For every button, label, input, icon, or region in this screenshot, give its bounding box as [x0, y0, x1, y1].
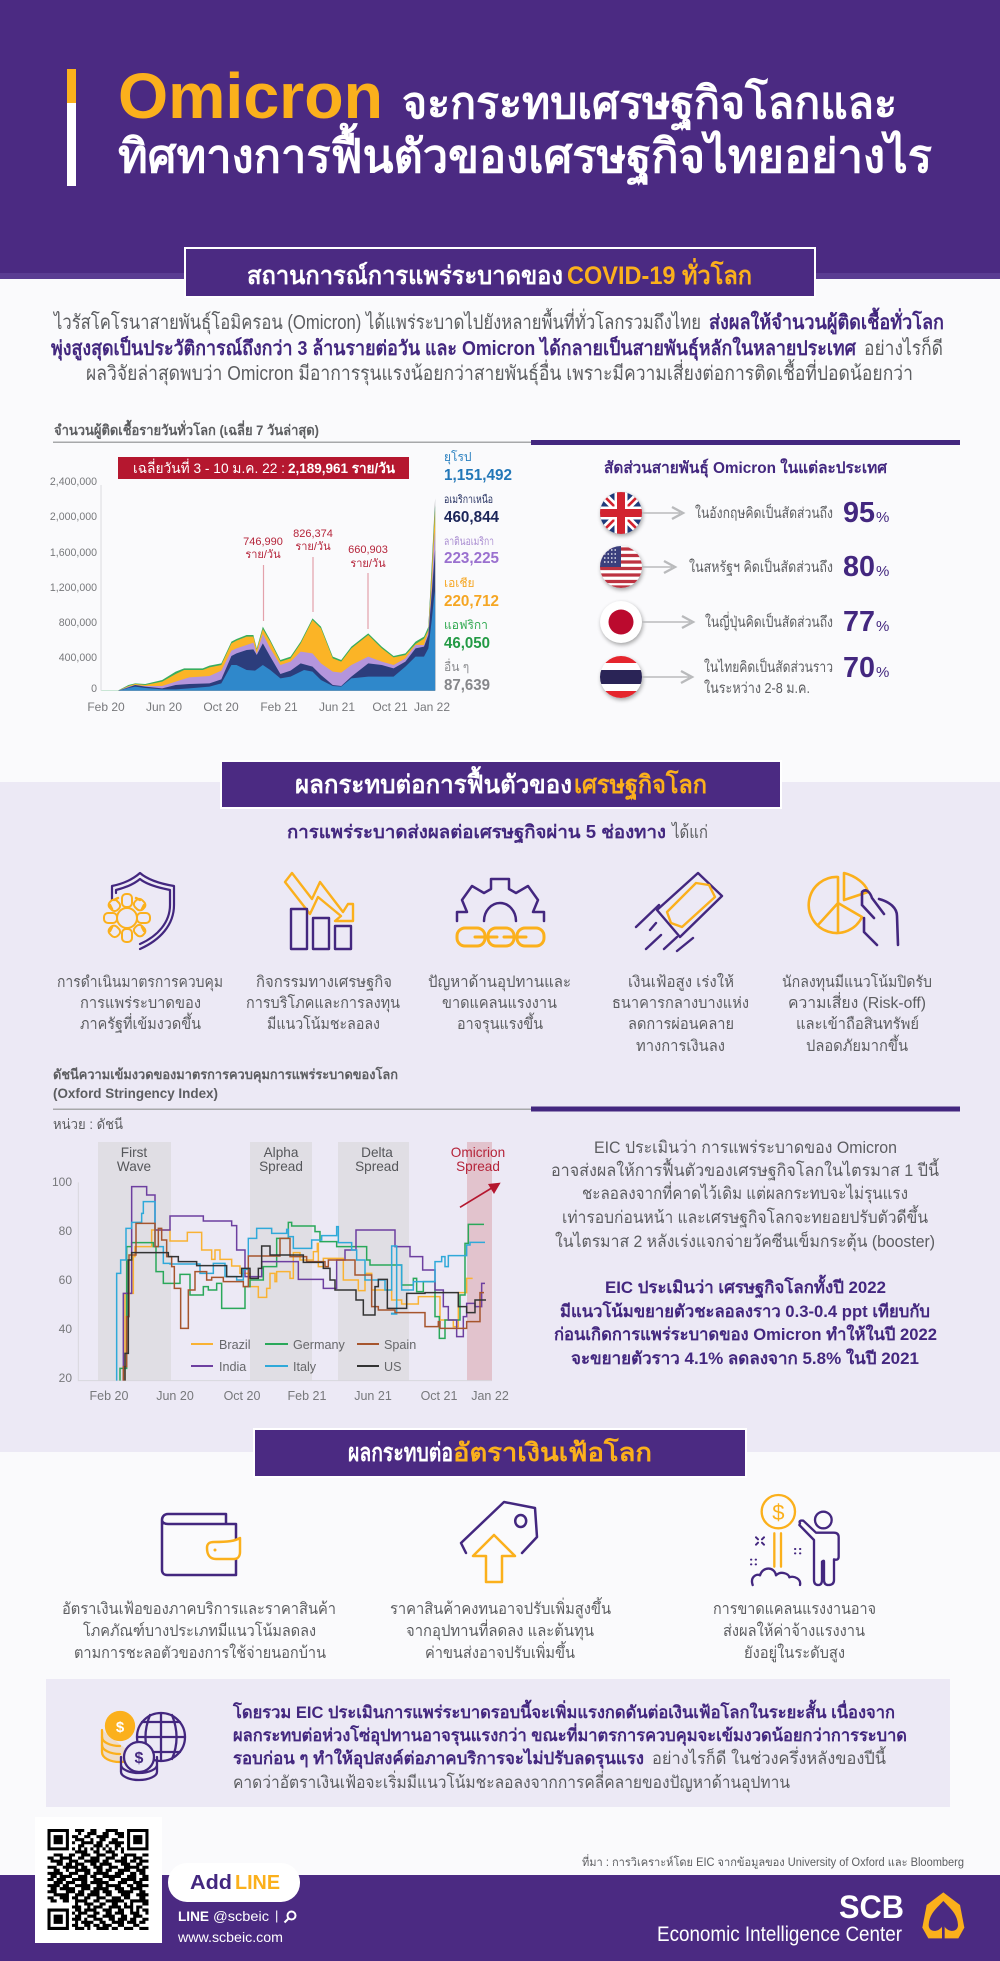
legend: India	[219, 1360, 246, 1374]
region legend values: แอฟริกา	[444, 618, 488, 632]
text	[390, 1597, 611, 1662]
row: Thailand: 70	[843, 652, 875, 684]
chart title: (Oxford Stringency Index)	[53, 1086, 218, 1101]
section heading: COVID-19 situation	[185, 248, 815, 297]
x axis labels: Jun 20	[146, 700, 182, 714]
text: การดำเนินมาตรการควบคุม	[57, 974, 223, 992]
icon: coins and globe: $	[116, 1719, 125, 1736]
region legend values: 460,844	[444, 509, 499, 526]
x axis labels: Feb 20	[90, 1389, 129, 1403]
row: UK: %	[876, 509, 889, 526]
text: ปัญหาด้านอุปทานและ	[428, 974, 571, 992]
text	[57, 974, 223, 1033]
text block: EIC assessment: ก่อนเกิดการแพร่ระบาดของ Omicron ทำให้ในปี 2022	[554, 1324, 937, 1344]
x axis labels: Oct 21	[372, 700, 408, 714]
text: ขาดแคลนแรงงาน	[442, 995, 557, 1012]
row: Thailand	[600, 652, 889, 700]
icon: gear and chain	[457, 879, 544, 946]
contact details	[177, 1908, 296, 1945]
row: UK	[600, 492, 889, 536]
inflation item 1	[62, 1514, 336, 1662]
x axis labels	[90, 1389, 509, 1403]
y axis labels: 80	[59, 1224, 72, 1238]
text	[612, 973, 749, 1055]
band labels: Delta	[361, 1145, 393, 1160]
legend: US	[384, 1360, 402, 1374]
channel 5: risk-off	[782, 873, 932, 1055]
section heading: COVID-19 situation: สถานการณ์การแพร่ระบาดของ	[247, 261, 563, 290]
x axis labels	[87, 700, 450, 714]
text block: EIC assessment: อาจส่งผลให้การฟื้นตัวของเศรษฐกิจโลกในไตรมาส 1 ปีนี้	[551, 1158, 939, 1181]
x axis labels: Jan 22	[414, 700, 450, 714]
x axis labels: Jun 20	[156, 1389, 194, 1403]
section heading: COVID-19 situation: COVID-19 ทั่วโลก	[567, 258, 752, 290]
region legend values: 220,712	[444, 593, 499, 610]
band labels	[117, 1145, 505, 1174]
peak annotations: ราย/วัน	[245, 549, 281, 561]
text block: EIC assessment: EIC ประเมินว่า การแพร่ระบาดของ Omicron	[594, 1138, 897, 1157]
x axis labels: Feb 20	[87, 700, 125, 714]
intro paragraph: อย่างไรก็ดี	[864, 335, 943, 360]
icon: flying banknote	[636, 873, 722, 951]
contact details: |	[275, 1908, 278, 1923]
icon: falling bars	[285, 873, 353, 949]
band labels: First	[121, 1145, 147, 1160]
text: มีแนวโน้มชะลอลง	[267, 1015, 380, 1033]
section heading: world inflation: อัตราเงินเฟ้อโลก	[453, 1437, 652, 1467]
row: US: %	[876, 563, 889, 580]
region legend values: เอเชีย	[444, 576, 475, 590]
text	[782, 973, 932, 1055]
text	[62, 1600, 336, 1662]
row: Japan: ในญี่ปุ่นคิดเป็นสัดส่วนถึง	[705, 611, 833, 632]
text: การแพร่ระบาดของ	[80, 995, 201, 1012]
row: Japan: %	[876, 618, 889, 635]
channel 2: economic activity	[246, 873, 400, 1033]
panel: EIC inflation summary	[46, 1679, 950, 1807]
header band	[0, 0, 1000, 279]
intro paragraph: พุ่งสูงสุดเป็นประวัติการณ์ถึงกว่า 3 ล้านรายต่อวัน และ Omicron ได้กลายเป็นสายพันธุ์หลักในหลายประเทศ	[51, 335, 857, 362]
intro paragraph: ไวรัสโคโรนาสายพันธุ์โอมิครอน (Omicron) ได้แพร่ระบาดไปยังหลายพื้นที่ทั่วโลกรวมถึงไทย	[52, 308, 701, 335]
panel heading: สัดส่วนสายพันธุ์ Omicron ในแต่ละประเทศ	[604, 458, 888, 478]
text: ธนาคารกลางบางแห่ง	[612, 995, 749, 1012]
title: Omicron	[118, 60, 383, 132]
band labels: Spread	[355, 1159, 399, 1174]
wave bands	[98, 1142, 492, 1381]
Add LINE button: LINE	[235, 1872, 280, 1894]
intro paragraph	[51, 307, 944, 386]
y axis labels: 800,000	[59, 617, 97, 629]
x axis labels: Oct 20	[203, 700, 239, 714]
Add LINE button: Add	[190, 1872, 232, 1894]
band labels: Spread	[456, 1159, 500, 1174]
text: และเข้าถือสินทรัพย์	[796, 1015, 919, 1033]
y axis labels	[52, 1175, 72, 1385]
row: US: ในสหรัฐฯ คิดเป็นสัดส่วนถึง	[689, 557, 833, 576]
legend: Italy	[293, 1360, 317, 1374]
SCB EIC logo: Economic Intelligence Center	[657, 1923, 902, 1946]
y axis labels: 0	[91, 683, 97, 695]
callout: average banner: เฉลี่ยวันที่ 3 - 10 ม.ค. 22 :	[133, 459, 285, 476]
contact details: @scbeic	[213, 1909, 269, 1924]
y axis labels: 100	[52, 1175, 72, 1189]
text: ภาครัฐที่เข้มงวดขึ้น	[80, 1012, 201, 1033]
text: ลดการผ่อนคลาย	[628, 1016, 734, 1033]
section heading: world economic recovery: เศรษฐกิจโลก	[574, 769, 707, 801]
icon: coins and globe: $	[135, 1750, 144, 1767]
text: จากอุปทานที่ลดลง และต้นทุน	[406, 1619, 594, 1641]
callout: average banner	[118, 457, 409, 479]
text: ปลอดภัยมากขึ้น	[806, 1034, 908, 1055]
text: นักลงทุนมีแนวโน้มปิดรับ	[782, 973, 932, 992]
row: Thailand: ในระหว่าง 2-8 ม.ค.	[704, 679, 810, 697]
callout: average banner: 2,189,961 ราย/วัน	[288, 460, 395, 476]
x axis labels: Feb 21	[288, 1389, 327, 1403]
x axis labels: Jan 22	[471, 1389, 509, 1403]
QR code	[35, 1817, 162, 1943]
region legend values: 87,639	[444, 677, 490, 694]
row: Japan: 77	[843, 606, 875, 638]
row: UK: 95	[843, 497, 875, 529]
y axis labels	[50, 476, 97, 695]
icon: coins and globe	[102, 1712, 185, 1780]
text block: EIC assessment	[551, 1138, 939, 1368]
text block: EIC assessment: เท่ารอบก่อนหน้า และเศรษฐกิจโลกจะทยอยปรับตัวดีขึ้น	[562, 1205, 928, 1228]
legend	[191, 1338, 416, 1374]
row: Japan	[600, 601, 889, 645]
region legend values: ลาตินอเมริกา	[444, 536, 494, 548]
y axis labels: 60	[59, 1273, 72, 1287]
region legend values: อเมริกาเหนือ	[444, 493, 493, 506]
region legend values: 1,151,492	[444, 467, 512, 484]
band labels: Wave	[117, 1159, 151, 1174]
text: ยังอยู่ในระดับสูง	[744, 1643, 845, 1663]
SCB EIC logo	[657, 1889, 964, 1946]
lavender section background	[0, 782, 1000, 1452]
channel 4: inflation	[612, 873, 749, 1055]
region legend values	[444, 450, 512, 694]
row: Thailand: ในไทยคิดเป็นสัดส่วนราว	[704, 657, 833, 676]
icon: person reaching coin: $	[772, 1500, 784, 1525]
panel: Omicron share by country	[600, 458, 889, 700]
peak annotations: 826,374	[293, 528, 333, 540]
title: ทิศทางการฟื้นตัวของเศรษฐกิจไทยอย่างไร	[118, 122, 932, 186]
section heading: world economic recovery	[221, 761, 781, 808]
intro paragraph: ส่งผลให้จำนวนผู้ติดเชื้อทั่วโลก	[709, 307, 944, 336]
source note: ที่มา : การวิเคราะห์โดย EIC จากข้อมูลของ University of Oxford และ Bloomberg	[582, 1854, 964, 1869]
title: จะกระทบเศรษฐกิจโลกและ	[402, 76, 897, 131]
channel 1: government measures	[57, 873, 223, 1033]
subheading: five channels: การแพร่ระบาดส่งผลต่อเศรษฐกิจผ่าน 5 ช่องทาง	[287, 822, 666, 844]
unit label: หน่วย : ดัชนี	[53, 1116, 123, 1132]
line chart	[78, 1182, 501, 1381]
icon: person reaching coin	[751, 1495, 839, 1585]
text	[428, 974, 571, 1034]
text: รอบก่อน ๆ ทำให้อุปสงค์ต่อภาคบริการจะไม่ปรับลดรุนแรง	[233, 1748, 644, 1769]
text block: EIC assessment: ชะลอลงจากที่คาดไว้เดิม แต่ผลกระทบจะไม่รุนแรง	[582, 1181, 908, 1204]
subheading: five channels: ได้แก่	[670, 821, 708, 842]
text block: EIC assessment: จะขยายตัวราว 4.1% ลดลงจาก 5.8% ในปี 2021	[571, 1348, 919, 1368]
y axis labels: 1,600,000	[50, 547, 97, 559]
y axis labels: 1,200,000	[50, 582, 97, 594]
icon: search	[284, 1912, 296, 1922]
icon: price tag and arrow	[461, 1502, 537, 1582]
text block: EIC assessment: ในไตรมาส 2 หลังเร่งแจกจ่ายวัคซีนเข็มกระตุ้น (booster)	[555, 1230, 935, 1252]
channel 3: supply chain	[428, 879, 571, 1034]
text	[246, 974, 400, 1033]
band labels: Alpha	[264, 1145, 299, 1160]
region legend values: 223,225	[444, 550, 499, 567]
band labels: Omicrion	[451, 1145, 505, 1160]
y axis labels: 400,000	[59, 652, 97, 664]
text: โภคภัณฑ์บางประเภทมีแนวโน้มลดลง	[83, 1621, 316, 1640]
peak annotations	[243, 528, 388, 629]
legend: Brazil	[219, 1338, 250, 1352]
text: โดยรวม EIC ประเมินการแพร่ระบาดรอบนี้จะเพิ่มแรงกดดันต่อเงินเฟ้อโลกในระยะสั้น เนื่องจาก	[232, 1699, 895, 1722]
SCB EIC logo: SCB	[839, 1889, 904, 1925]
inflation item 3	[713, 1495, 876, 1663]
legend: Germany	[293, 1338, 345, 1352]
chart panel: daily global cases	[50, 419, 960, 714]
row: Thailand: %	[876, 664, 889, 681]
text	[232, 1699, 907, 1793]
region legend values: อื่น ๆ	[444, 658, 469, 674]
chart panel: Oxford Stringency Index	[52, 1065, 960, 1403]
chart title: จำนวนผู้ติดเชื้อรายวันทั่วโลก (เฉลี่ย 7 วันล่าสุด)	[54, 419, 319, 439]
y axis labels: 2,400,000	[50, 476, 97, 488]
text: ราคาสินค้าคงทนอาจปรับเพิ่มสูงขึ้น	[390, 1597, 611, 1619]
stacked area chart	[101, 485, 435, 691]
text: ส่งผลให้ค่าจ้างแรงงาน	[723, 1621, 865, 1640]
x axis labels: Jun 21	[319, 700, 355, 714]
y axis labels: 2,000,000	[50, 511, 97, 523]
y axis labels: 40	[59, 1322, 72, 1336]
legend: Spain	[384, 1338, 416, 1352]
text block: EIC assessment: มีแนวโน้มขยายตัวชะลอลงราว 0.3-0.4 ppt เทียบกับ	[560, 1301, 930, 1321]
icon: pie and hand	[809, 873, 898, 945]
row: US	[600, 546, 889, 590]
x axis labels: Feb 21	[260, 700, 298, 714]
region legend values: ยุโรป	[444, 450, 472, 465]
section heading: world economic recovery: ผลกระทบต่อการฟื้นตัวของ	[295, 765, 572, 799]
text: ผลกระทบต่อห่วงโซ่อุปทานอาจรุนแรงกว่า ขณะที่มาตรการควบคุมจะเข้มงวดน้อยกว่าการระบาด	[233, 1723, 907, 1746]
contact details: www.scbeic.com	[177, 1930, 283, 1945]
text: อาจรุนแรงขึ้น	[457, 1012, 543, 1034]
Add LINE button	[168, 1863, 300, 1902]
text: กิจกรรมทางเศรษฐกิจ	[256, 974, 392, 991]
text: คาดว่าอัตราเงินเฟ้อจะเริ่มมีแนวโน้มชะลอลงจากการคลี่คลายของปัญหาด้านอุปทาน	[233, 1770, 790, 1793]
peak annotations: 660,903	[348, 544, 388, 556]
section heading: world inflation	[254, 1429, 746, 1477]
section heading: world inflation: ผลกระทบต่อ	[348, 1439, 453, 1467]
text: เงินเฟ้อสูง เร่งให้	[628, 973, 734, 992]
text: อัตราเงินเฟ้อของภาคบริการและราคาสินค้า	[62, 1600, 336, 1618]
x axis labels: Jun 21	[354, 1389, 392, 1403]
icon: wallet	[162, 1514, 240, 1575]
x axis labels: Oct 21	[421, 1389, 457, 1403]
band labels: Spread	[259, 1159, 303, 1174]
text: การบริโภคและการลงทุน	[246, 994, 400, 1013]
text: ตามการชะลอตัวของการใช้จ่ายนอกบ้าน	[74, 1643, 326, 1662]
title	[118, 60, 932, 186]
text block: EIC assessment: EIC ประเมินว่า เศรษฐกิจโลกทั้งปี 2022	[605, 1274, 886, 1299]
peak annotations: 746,990	[243, 536, 283, 548]
text: ความเสี่ยง (Risk-off)	[788, 992, 926, 1012]
chart title	[53, 1065, 398, 1101]
text: ทางการเงินลง	[636, 1038, 725, 1055]
icon: shield and virus	[104, 873, 174, 949]
region legend values: 46,050	[444, 635, 490, 652]
footer band	[0, 1875, 1000, 1961]
contact details: LINE	[178, 1909, 209, 1924]
row: US: 80	[843, 551, 875, 583]
inflation item 2	[390, 1502, 611, 1662]
icon: lotus mark	[922, 1892, 964, 1939]
chart title: ดัชนีความเข้มงวดของมาตรการควบคุมการแพร่ระบาดของโลก	[53, 1065, 398, 1083]
y axis labels: 20	[59, 1371, 72, 1385]
peak annotations: ราย/วัน	[350, 558, 386, 570]
title accent bar	[67, 69, 76, 186]
text: อย่างไรก็ดี ในช่วงครึ่งหลังของปีนี้	[652, 1746, 886, 1768]
row: UK: ในอังกฤษคิดเป็นสัดส่วนถึง	[695, 503, 833, 522]
text: ค่าขนส่งอาจปรับเพิ่มขึ้น	[425, 1641, 575, 1662]
peak annotations: ราย/วัน	[295, 541, 331, 553]
x axis labels: Oct 20	[224, 1389, 260, 1403]
text: การขาดแคลนแรงงานอาจ	[713, 1601, 876, 1618]
text	[713, 1601, 876, 1663]
